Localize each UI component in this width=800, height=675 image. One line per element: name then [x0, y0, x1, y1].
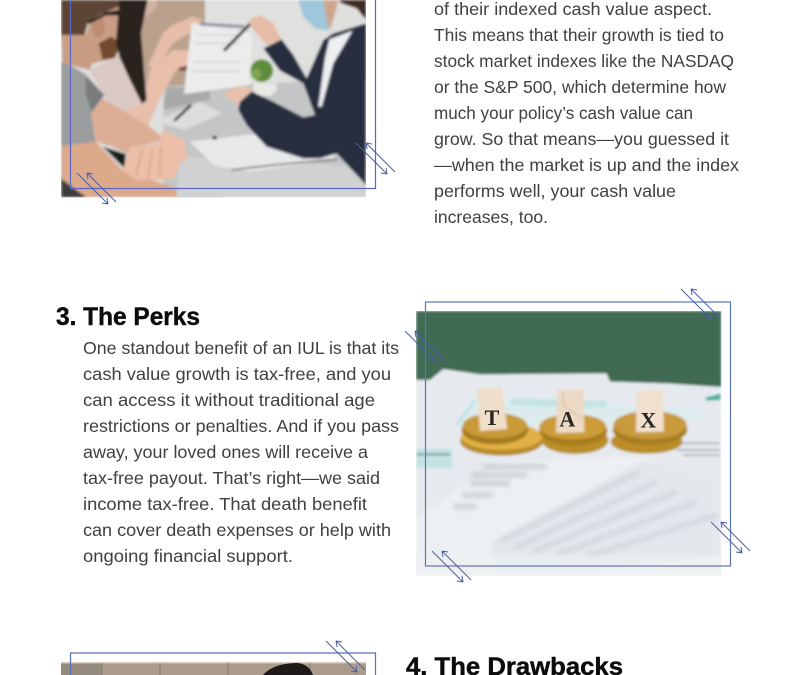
- frame: blue outline around photo: [426, 302, 730, 566]
- body text: indexed cash value explanation: This means that their growth is tied to: [434, 25, 724, 45]
- arrows: lower right of photo: [711, 522, 750, 553]
- arrows: right of photo: [356, 143, 395, 174]
- heading: 3. The Perks: 3. The Perks: [56, 303, 200, 331]
- body text: indexed cash value explanation: increases, too.: [434, 207, 548, 227]
- body text: perks of an IUL: One standout benefit of an IUL is that its: [83, 338, 399, 358]
- body text: indexed cash value explanation: performs well, your cash value: [434, 181, 676, 201]
- section 2: cash value growth: [61, 0, 739, 227]
- body text: indexed cash value explanation: —when the market is up and the index: [434, 155, 739, 175]
- body text: indexed cash value explanation: much your policy’s cash value can: [434, 103, 693, 123]
- blocks lettered T A X: T: [485, 405, 500, 430]
- body text: indexed cash value explanation: [434, 0, 739, 227]
- photo: TAX blocks on gold coins over tax forms: [410, 311, 727, 578]
- blocks lettered T A X: [484, 410, 656, 428]
- photo: top edge of next image with person's head: [61, 662, 366, 675]
- body text: perks of an IUL: away, your loved ones will receive a: [83, 442, 368, 462]
- section 4: the drawbacks: [61, 641, 623, 675]
- arrows: bottom left of photo: [432, 551, 471, 582]
- blocks lettered T A X: A: [559, 406, 575, 431]
- body text: perks of an IUL: income tax-free. That death benefit: [83, 494, 367, 514]
- body text: indexed cash value explanation: or the S&P 500, which determine how: [434, 77, 726, 97]
- photo: couple reviewing a document with an adviser: [61, 0, 367, 200]
- body text: perks of an IUL: can access it without traditional age: [83, 390, 375, 410]
- body text: perks of an IUL: can cover death expenses or help with: [83, 520, 391, 540]
- body text: perks of an IUL: restrictions or penalties. And if you pass: [83, 416, 399, 436]
- arrows: top right of photo: [326, 641, 365, 672]
- frame: blue outline around photo: [70, 0, 376, 188]
- arrows: bottom left of photo: [77, 173, 116, 204]
- arrows: top right of photo: [681, 289, 720, 320]
- blocks lettered T A X: X: [640, 408, 656, 433]
- arrows: upper left of photo: [405, 331, 444, 362]
- body text: indexed cash value explanation: stock market indexes like the NASDAQ: [434, 51, 734, 71]
- body text: perks of an IUL: [83, 338, 399, 566]
- body text: perks of an IUL: tax-free payout. That’s right—we said: [83, 468, 380, 488]
- body text: perks of an IUL: ongoing financial support.: [83, 546, 293, 566]
- frame: blue outline around photo: [70, 653, 376, 675]
- section 3: the perks: [56, 289, 750, 582]
- body text: perks of an IUL: cash value growth is tax-free, and you: [83, 364, 391, 384]
- body text: indexed cash value explanation: grow. So that means—you guessed it: [434, 129, 729, 149]
